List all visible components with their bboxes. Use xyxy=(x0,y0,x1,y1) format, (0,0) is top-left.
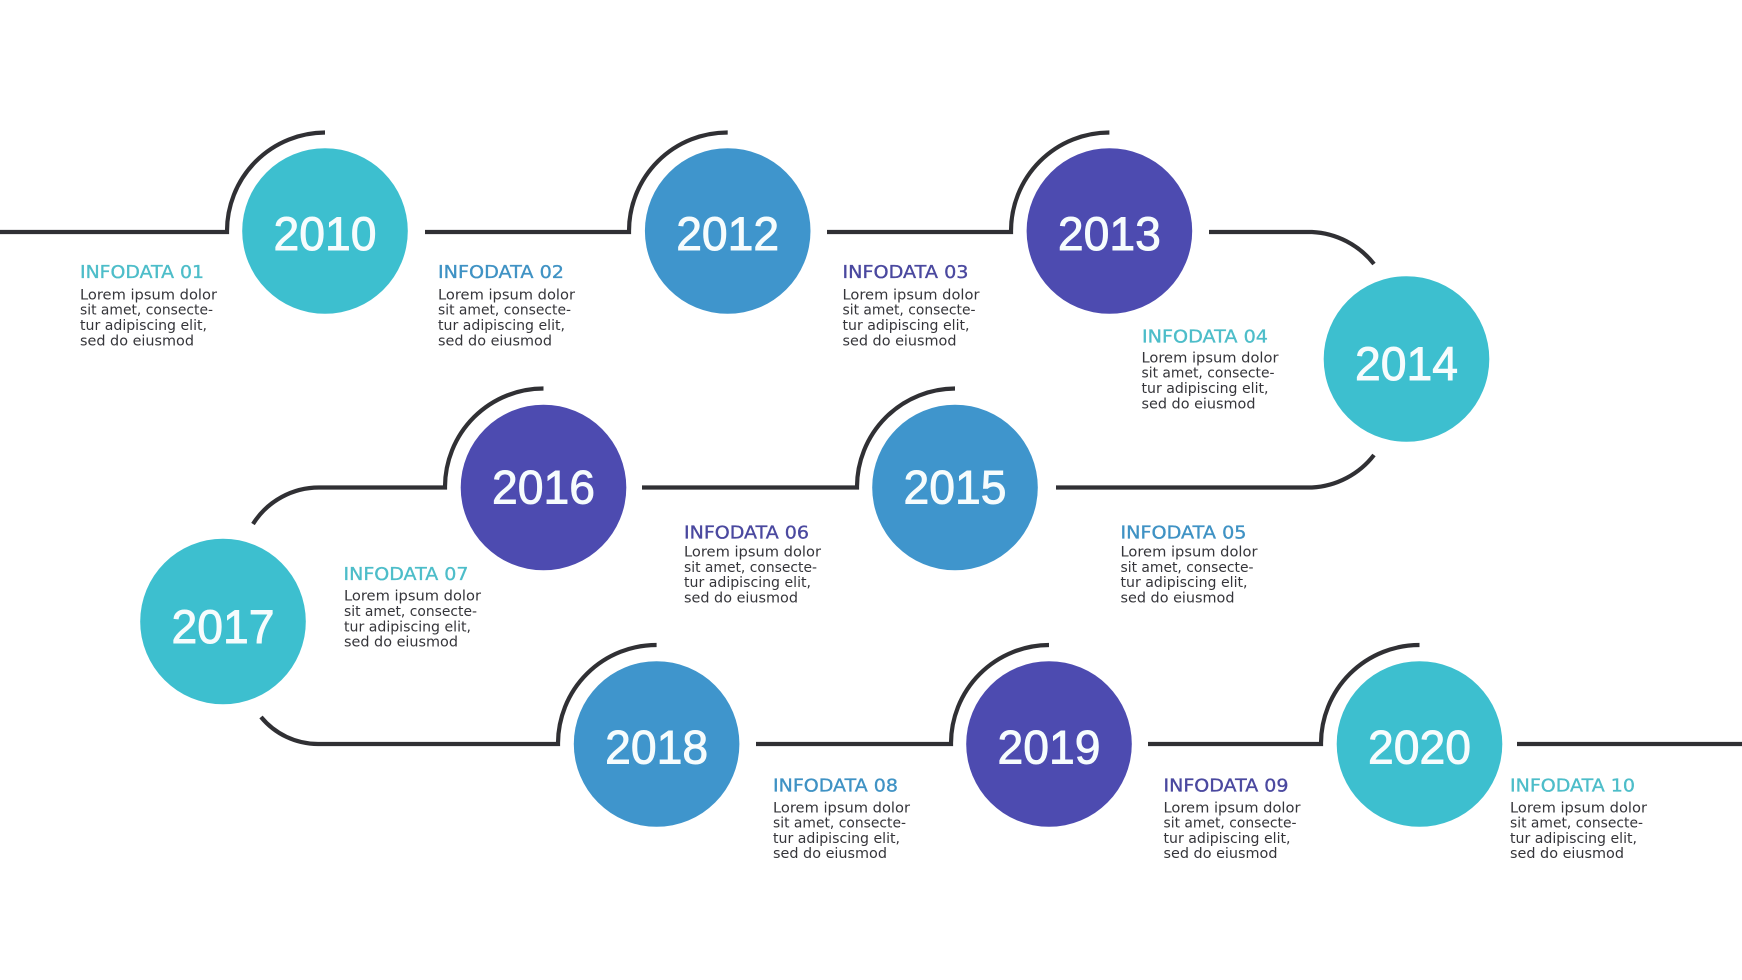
text block: infodata 07 xyxy=(344,564,481,651)
text block: infodata 10: sed do eiusmod xyxy=(1510,845,1624,862)
text block: infodata 08 xyxy=(773,776,910,862)
node: 2015: 2015 xyxy=(904,461,1006,514)
text block: infodata 03: INFODATA 03 xyxy=(842,262,968,283)
text block: infodata 05: sed do eiusmod xyxy=(1120,589,1234,606)
text block: infodata 01 xyxy=(80,262,217,349)
text block: infodata 03: sit amet, consecte- xyxy=(842,302,976,319)
text block: infodata 06: Lorem ipsum dolor xyxy=(684,544,821,561)
text block: infodata 04: sed do eiusmod xyxy=(1142,395,1256,412)
text block: infodata 03: tur adipiscing elit, xyxy=(842,317,970,334)
text block: infodata 02: Lorem ipsum dolor xyxy=(438,286,575,303)
text block: infodata 08: INFODATA 08 xyxy=(773,776,898,796)
text block: infodata 10: INFODATA 10 xyxy=(1510,776,1635,796)
connector: 2014 to 2015 xyxy=(1056,455,1374,488)
text block: infodata 01: Lorem ipsum dolor xyxy=(80,286,217,303)
text block: infodata 01: sit amet, consecte- xyxy=(80,302,213,319)
connector: 2016 to 2017 xyxy=(253,388,544,524)
text block: infodata 02: sed do eiusmod xyxy=(438,332,552,349)
text block: infodata 06: sed do eiusmod xyxy=(684,589,798,606)
text block: infodata 10: Lorem ipsum dolor xyxy=(1510,799,1647,816)
text block: infodata 08: Lorem ipsum dolor xyxy=(773,799,910,816)
text block: infodata 09: sit amet, consecte- xyxy=(1164,815,1296,832)
node: 2020 xyxy=(1337,661,1502,827)
text block: infodata 05: INFODATA 05 xyxy=(1120,522,1246,543)
text block: infodata 04: Lorem ipsum dolor xyxy=(1142,349,1278,366)
node: 2017: 2017 xyxy=(172,601,274,654)
connector: 2013 to 2014 xyxy=(1209,232,1374,264)
node: 2012: 2012 xyxy=(676,208,779,261)
text block: infodata 10: sit amet, consecte- xyxy=(1510,815,1643,832)
text block: infodata 02: tur adipiscing elit, xyxy=(438,317,565,334)
text block: infodata 05: Lorem ipsum dolor xyxy=(1120,544,1258,561)
connector: 2015 to 2016 xyxy=(642,388,955,488)
text block: infodata 08: sit amet, consecte- xyxy=(773,815,906,832)
text block: infodata 07: sed do eiusmod xyxy=(344,634,458,651)
text block: infodata 07: sit amet, consecte- xyxy=(344,603,477,620)
text block: infodata 04 xyxy=(1142,326,1278,412)
text block: infodata 06: sit amet, consecte- xyxy=(684,559,817,576)
text block: infodata 05: sit amet, consecte- xyxy=(1120,559,1254,576)
connector: 2010 to 2012 xyxy=(425,132,728,232)
node: 2010 xyxy=(242,148,408,314)
text block: infodata 10 xyxy=(1510,776,1647,862)
text block: infodata 01: sed do eiusmod xyxy=(80,332,194,349)
text block: infodata 09: INFODATA 09 xyxy=(1164,776,1288,796)
text block: infodata 07: tur adipiscing elit, xyxy=(344,618,471,635)
text block: infodata 06: INFODATA 06 xyxy=(684,522,809,543)
text block: infodata 01: INFODATA 01 xyxy=(80,262,204,283)
connector: 2017 to 2018 xyxy=(261,645,657,744)
text block: infodata 05: tur adipiscing elit, xyxy=(1120,574,1248,591)
text block: infodata 05 xyxy=(1120,522,1258,606)
node: 2016: 2016 xyxy=(492,461,595,514)
node: 2015 xyxy=(872,405,1038,570)
connector: 2012 to 2013 xyxy=(827,132,1109,232)
text block: infodata 09 xyxy=(1164,776,1300,862)
connector: 2019 to 2020 xyxy=(1148,645,1420,744)
text block: infodata 03: sed do eiusmod xyxy=(842,332,956,349)
text block: infodata 08: tur adipiscing elit, xyxy=(773,830,900,847)
node: 2016 xyxy=(461,405,626,570)
text block: infodata 04: INFODATA 04 xyxy=(1142,326,1268,348)
text block: infodata 02: INFODATA 02 xyxy=(438,262,564,283)
text block: infodata 08: sed do eiusmod xyxy=(773,845,887,862)
node: 2019: 2019 xyxy=(998,721,1100,774)
text block: infodata 06 xyxy=(684,522,821,606)
text block: infodata 07: Lorem ipsum dolor xyxy=(344,588,481,605)
text block: infodata 02 xyxy=(438,262,575,349)
node: 2013 xyxy=(1027,148,1192,314)
text block: infodata 02: sit amet, consecte- xyxy=(438,302,571,319)
connector: 2020 to end xyxy=(1517,742,1742,746)
text block: infodata 06: tur adipiscing elit, xyxy=(684,574,811,591)
node: 2012 xyxy=(645,148,810,314)
text block: infodata 04: sit amet, consecte- xyxy=(1142,365,1274,382)
text block: infodata 09: Lorem ipsum dolor xyxy=(1164,799,1300,816)
text block: infodata 03 xyxy=(842,262,980,349)
node: 2010: 2010 xyxy=(274,208,376,261)
node: 2020: 2020 xyxy=(1368,721,1471,774)
node: 2014 xyxy=(1324,276,1489,442)
text block: infodata 09: tur adipiscing elit, xyxy=(1164,830,1290,847)
node: 2013: 2013 xyxy=(1058,208,1161,261)
node: 2019 xyxy=(966,661,1132,827)
text block: infodata 10: tur adipiscing elit, xyxy=(1510,830,1637,847)
text block: infodata 03: Lorem ipsum dolor xyxy=(842,286,980,303)
text block: infodata 01: tur adipiscing elit, xyxy=(80,317,207,334)
node: 2017 xyxy=(140,539,306,704)
text block: infodata 04: tur adipiscing elit, xyxy=(1142,380,1268,397)
text block: infodata 09: sed do eiusmod xyxy=(1164,845,1278,862)
node: 2018 xyxy=(574,661,739,827)
node: 2014: 2014 xyxy=(1355,338,1458,391)
node: 2018: 2018 xyxy=(605,721,708,774)
connector: start to 2010 xyxy=(0,132,325,232)
text block: infodata 07: INFODATA 07 xyxy=(344,564,468,585)
connector: 2018 to 2019 xyxy=(756,645,1049,744)
